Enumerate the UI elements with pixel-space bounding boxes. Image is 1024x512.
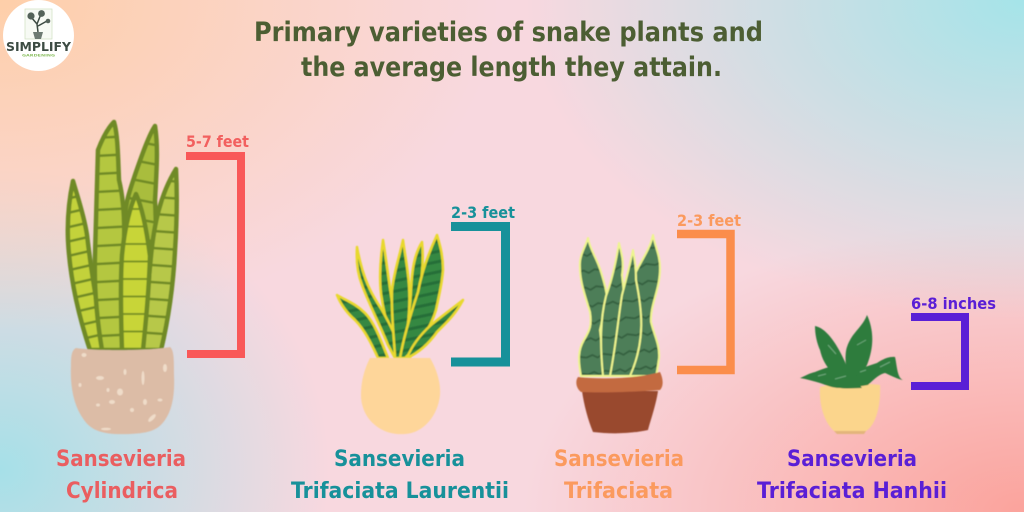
label: Sansevieria Trifaciata: Sansevieria bbox=[554, 446, 684, 472]
height bracket: 2-3 feet orange bbox=[677, 211, 741, 370]
label: Sansevieria Cylindrica: Cylindrica bbox=[66, 478, 178, 504]
plant: Sansevieria Cylindrica bbox=[68, 122, 177, 434]
label: Sansevieria Trifaciata Laurentii bbox=[291, 446, 509, 504]
plant: Sansevieria Trifaciata Hanhii bbox=[800, 315, 903, 434]
label: Sansevieria Trifaciata Laurentii: Trifaciata Laurentii bbox=[291, 478, 509, 504]
label: Sansevieria Trifaciata bbox=[554, 446, 684, 504]
leaves: cylindrica bbox=[68, 122, 177, 350]
height bracket: 6-8 inches bbox=[911, 294, 996, 386]
label: Sansevieria Trifaciata Hanhii: Sansevieria bbox=[787, 446, 917, 472]
title bbox=[254, 17, 763, 83]
leaf markings bbox=[818, 340, 890, 379]
pot: round yellow bbox=[361, 358, 440, 434]
label: Sansevieria Trifaciata: Trifaciata bbox=[564, 478, 673, 504]
title: the average length they attain. bbox=[301, 52, 722, 83]
logo bbox=[3, 0, 74, 71]
pot: speckled clay bbox=[71, 347, 174, 434]
logo wordmark: SIMPLIFY bbox=[6, 39, 72, 54]
leaves: hanhii bbox=[800, 315, 903, 388]
leaves: trifaciata bbox=[579, 235, 660, 376]
label: Sansevieria Cylindrica: Sansevieria bbox=[56, 446, 186, 472]
plant: Sansevieria Trifaciata Laurentii bbox=[337, 235, 463, 434]
pot: terracotta bbox=[576, 372, 663, 433]
leaves: laurentii bbox=[337, 235, 463, 358]
pot: small yellow bbox=[820, 384, 880, 434]
height bracket: 2-3 feet teal bbox=[451, 203, 515, 362]
height label: 2-3 feet bbox=[451, 203, 515, 222]
label: Sansevieria Trifaciata Hanhii bbox=[757, 446, 947, 504]
height label: 5-7 feet bbox=[186, 132, 249, 151]
label: Sansevieria Trifaciata Laurentii: Sansevieria bbox=[334, 446, 465, 472]
title: Primary varieties of snake plants and bbox=[254, 17, 763, 48]
height bracket: 5-7 feet bbox=[186, 132, 249, 354]
plant: Sansevieria Trifaciata bbox=[576, 235, 663, 433]
label: Sansevieria Trifaciata Hanhii: Trifaciata Hanhii bbox=[757, 478, 947, 504]
label: Sansevieria Cylindrica bbox=[56, 446, 186, 504]
height label: 6-8 inches bbox=[911, 294, 996, 313]
logo tagline: GARDENING bbox=[22, 52, 55, 58]
height label: 2-3 feet bbox=[677, 211, 741, 230]
icon: logo plant bbox=[25, 9, 52, 39]
